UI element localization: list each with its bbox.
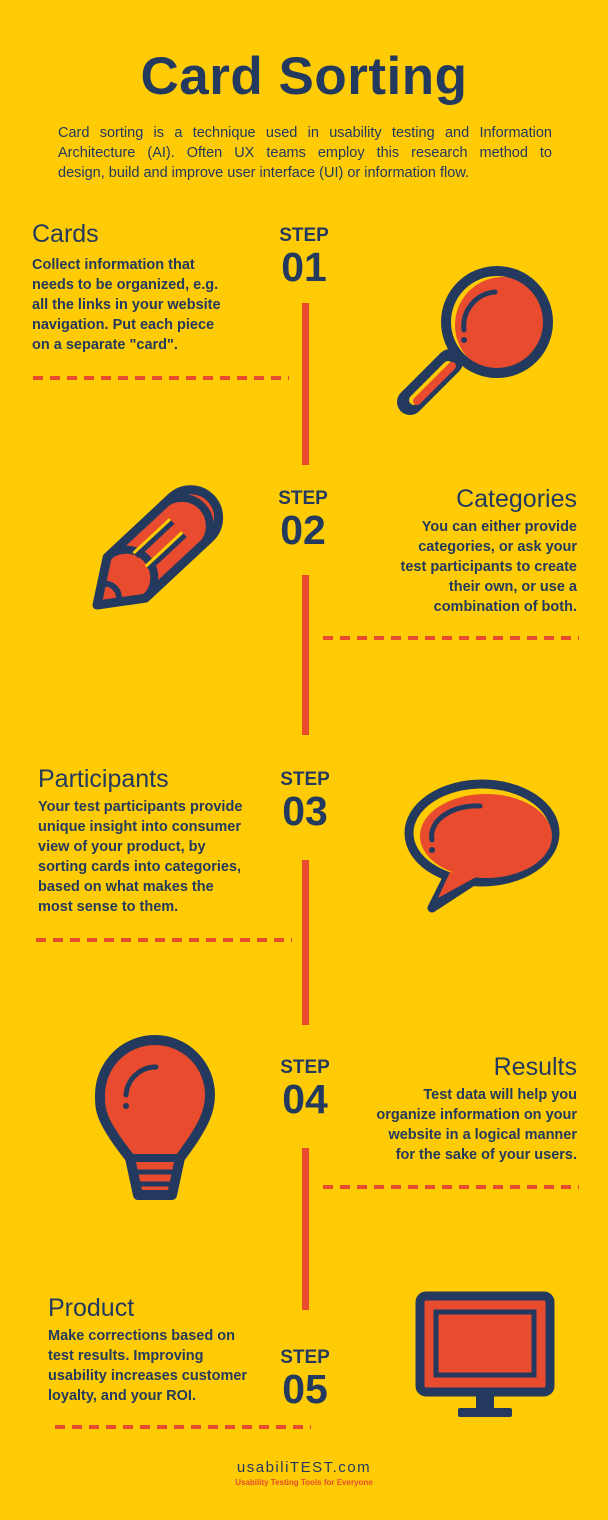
step 1 text: all the links in your website — [32, 297, 221, 313]
title: Card Sorting — [141, 47, 467, 106]
step 5 text: usability increases customer — [48, 1368, 247, 1384]
step 1 text — [32, 257, 221, 353]
step 3 text: unique insight into consumer — [38, 819, 241, 835]
step 1 text: on a separate "card". — [32, 337, 178, 353]
footer tagline: Usability Testing Tools for Everyone — [235, 1478, 373, 1487]
step 2 text: combination of both. — [434, 599, 577, 615]
step 2 text — [400, 519, 578, 615]
step 3 text — [38, 799, 242, 915]
step 4 text: website in a logical manner — [388, 1127, 577, 1143]
step 4 text: Test data will help you — [423, 1087, 577, 1103]
step 3 label: STEP — [280, 769, 330, 790]
step 4 text: for the sake of your users. — [396, 1147, 577, 1163]
step 1 text: navigation. Put each piece — [32, 317, 214, 333]
step 3 text: Your test participants provide — [38, 799, 242, 815]
step 1 label — [279, 225, 329, 290]
step 5 text: test results. Improving — [48, 1348, 204, 1364]
timeline segment — [302, 1148, 309, 1310]
step 4 label: STEP — [280, 1057, 330, 1078]
step 2 label: 02 — [280, 507, 326, 553]
icon: light bulb — [95, 1035, 215, 1200]
step 2 text: You can either provide — [422, 519, 577, 535]
step 1 label: 01 — [281, 244, 327, 290]
intro text: Architecture (AI). Often UX teams employ this research method to — [58, 145, 552, 161]
step 2 text: categories, or ask your — [418, 539, 577, 555]
step 3 text: sorting cards into categories, — [38, 859, 241, 875]
intro text — [58, 125, 552, 181]
step 5 text: Make corrections based on — [48, 1328, 235, 1344]
icon: speech bubble — [404, 780, 560, 912]
icon: pencil — [92, 485, 224, 610]
step 5 text: loyalty, and your ROI. — [48, 1388, 196, 1404]
step 3 label — [280, 769, 330, 834]
step 3 text: view of your product, by — [38, 839, 206, 855]
step 3 heading: Participants — [38, 765, 169, 793]
step 4 heading: Results — [494, 1053, 577, 1081]
step 2 heading: Categories — [456, 485, 577, 513]
timeline segment — [302, 860, 309, 1025]
step 4 text — [376, 1087, 577, 1163]
timeline segment — [302, 575, 309, 735]
step 1 text: Collect information that — [32, 257, 195, 273]
timeline segment — [302, 303, 309, 465]
step 4 text: organize information on your — [376, 1107, 577, 1123]
icon: monitor — [416, 1292, 554, 1417]
intro text: design, build and improve user interface (UI) or information flow. — [58, 165, 469, 181]
step 1 heading: Cards — [32, 220, 99, 248]
step 3 text: most sense to them. — [38, 899, 178, 915]
footer brand: usabiliTEST.com — [237, 1459, 371, 1476]
step 4 label — [280, 1057, 330, 1122]
step 5 label: 05 — [282, 1366, 328, 1412]
step 1 text: needs to be organized, e.g. — [32, 277, 218, 293]
step 2 label: STEP — [278, 488, 328, 509]
step 3 label: 03 — [282, 788, 328, 834]
step 2 text: test participants to create — [401, 559, 577, 575]
step 5 label — [280, 1347, 330, 1412]
step 4 label: 04 — [282, 1076, 328, 1122]
icon: magnifier — [397, 266, 553, 415]
step 5 label: STEP — [280, 1347, 330, 1368]
step 2 label — [278, 488, 328, 553]
step 1 label: STEP — [279, 225, 329, 246]
step 3 text: based on what makes the — [38, 879, 214, 895]
step 2 text: their own, or use a — [449, 579, 577, 595]
step 5 heading: Product — [48, 1294, 134, 1322]
intro text: Card sorting is a technique used in usability testing and Information — [58, 125, 552, 141]
step 5 text — [48, 1328, 247, 1404]
